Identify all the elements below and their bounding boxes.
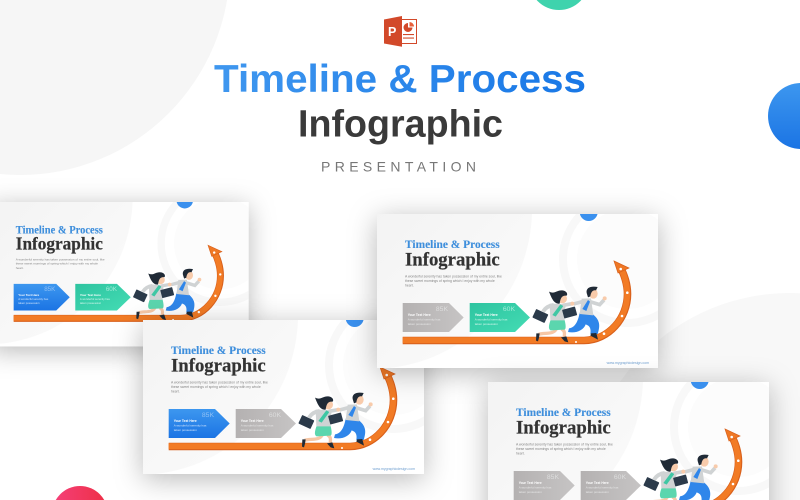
decorative blue circle right	[768, 83, 800, 149]
footer url: www.mygraphicdesign.com	[607, 361, 649, 365]
title: Timeline & Process: Timeline & Process	[214, 58, 586, 101]
orange growth arrow	[403, 261, 629, 343]
text block: heart.	[405, 284, 414, 288]
arrow box 60K: A wonderful serenity has	[241, 424, 274, 428]
arrow box 85K	[14, 284, 70, 311]
panel: slide left with blue and teal boxes	[0, 192, 263, 366]
text block: A wonderful serenity has taken possession of my entire soul, like	[16, 257, 105, 261]
heading: Timeline & Process	[516, 405, 611, 419]
arrow box 60K: Your Text Here	[475, 313, 498, 317]
text block: A wonderful serenity has taken possession of my entire soul, like	[516, 442, 613, 446]
icon: PowerPoint logo	[384, 16, 416, 47]
arrow box 85K	[169, 409, 230, 438]
text block: A wonderful serenity has taken possession of my entire soul, like	[171, 380, 268, 384]
arrow box 85K: 85K	[44, 286, 56, 293]
arrow box 85K: taken possession	[18, 301, 40, 305]
text block: heart.	[16, 266, 24, 270]
arrow box 60K: 60K	[106, 286, 118, 293]
arrow box 60K: Your Text Here	[80, 293, 101, 297]
arrow box 60K: Your Text Here	[586, 481, 609, 485]
icon: PowerPoint logo: P	[388, 25, 396, 39]
arrow box 60K: 60K	[503, 306, 515, 313]
arrow box 85K: A wonderful serenity has	[18, 297, 49, 301]
text block: heart.	[516, 452, 525, 456]
text block: A wonderful serenity has taken possession of my entire soul, like	[405, 274, 502, 278]
orange growth arrow	[169, 367, 395, 449]
arrow box 60K: Your Text Here	[241, 419, 264, 423]
arrow box 60K	[581, 471, 641, 500]
arrow box 60K: A wonderful serenity has	[80, 297, 110, 301]
arrow box 60K: A wonderful serenity has	[475, 318, 508, 322]
arrow box 85K: A wonderful serenity has	[408, 318, 441, 322]
arrow box 60K: taken possession	[80, 301, 102, 305]
arrow box 85K: Your Text Here	[174, 419, 197, 423]
arrow box 60K: taken possession	[475, 322, 498, 326]
heading: Infographic	[171, 356, 266, 377]
illustration: running business people	[643, 455, 718, 500]
panel: slide centre with blue and grey boxes	[127, 309, 440, 495]
arrow box 85K: 85K	[547, 474, 559, 481]
heading: Timeline & Process	[171, 343, 266, 357]
arrow box 60K	[236, 409, 296, 438]
arrow box 85K: taken possession	[174, 428, 197, 432]
arrow box 85K: 85K	[436, 306, 448, 313]
decorative teal circle top	[529, 0, 589, 10]
panel: slide right with grey and teal boxes	[361, 203, 674, 389]
arrow box 85K: taken possession	[519, 490, 542, 494]
arrow box 85K: 85K	[202, 412, 214, 419]
heading: Timeline & Process	[16, 224, 104, 236]
arrow box 60K	[470, 303, 530, 332]
text block: these sweet mornings of spring which I enjoy with my whole	[16, 262, 98, 266]
panel: slide bottom right with two grey boxes	[472, 371, 785, 500]
decorative red circle bottom	[52, 486, 108, 500]
illustration: running business people	[133, 269, 201, 320]
arrow box 60K: taken possession	[586, 490, 609, 494]
arrow box 85K: Your Text Here	[18, 293, 40, 297]
arrow box 85K: A wonderful serenity has	[174, 424, 207, 428]
orange growth arrow	[713, 428, 742, 500]
arrow box 85K	[403, 303, 464, 332]
decorative large grey circle bottom right	[583, 293, 800, 500]
arrow box 85K: taken possession	[408, 322, 431, 326]
subtitle: Presentation: PRESENTATION	[321, 159, 476, 175]
arrow box 85K: Your Text Here	[408, 313, 431, 317]
arrow box 85K: Your Text Here	[519, 481, 542, 485]
arrow box 60K	[75, 284, 131, 311]
arrow box 60K: 60K	[614, 474, 626, 481]
illustration: running business people	[298, 393, 373, 448]
text block: these sweet mornings of spring which I enjoy with my whole	[405, 279, 495, 283]
footer url: www.mygraphicdesign.com	[373, 467, 415, 471]
heading: Timeline & Process	[405, 237, 500, 251]
orange growth arrow	[14, 245, 222, 321]
arrow box 60K: taken possession	[241, 428, 264, 432]
decorative large grey circle top left	[0, 0, 230, 175]
text block: these sweet mornings of spring which I enjoy with my whole	[516, 447, 606, 451]
text block: these sweet mornings of spring which I enjoy with my whole	[171, 385, 261, 389]
arrow box 60K: 60K	[269, 412, 281, 419]
heading: Infographic	[16, 234, 103, 254]
text block: heart.	[171, 390, 180, 394]
arrow box 85K: A wonderful serenity has	[519, 486, 552, 490]
arrow box 60K: A wonderful serenity has	[586, 486, 619, 490]
heading: Infographic	[516, 418, 611, 439]
arrow box 85K	[514, 471, 575, 500]
illustration: running business people	[532, 287, 607, 342]
title: Infographic: Infographic	[298, 104, 503, 146]
heading: Infographic	[405, 250, 500, 271]
